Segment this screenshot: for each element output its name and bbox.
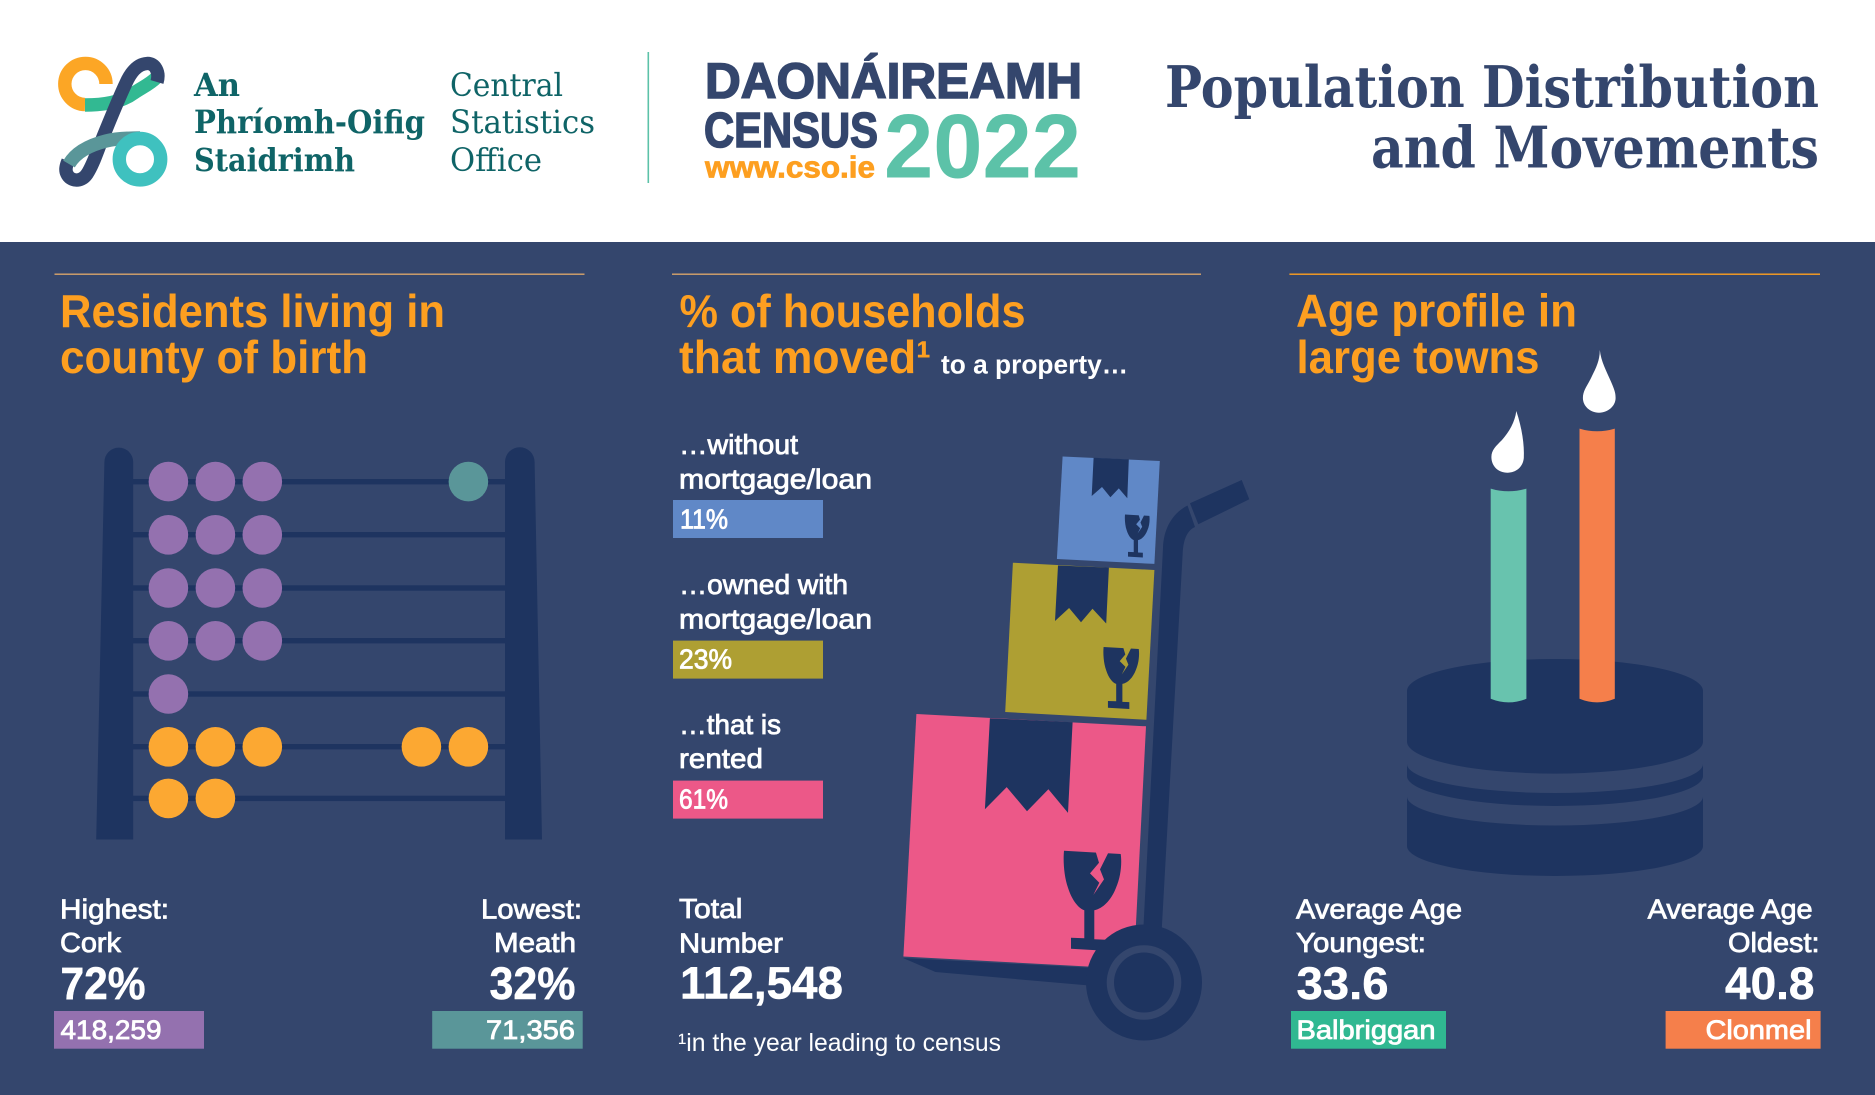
stat: highest Cork: 418,259: [60, 1015, 162, 1045]
header: CSO logo: [65, 63, 595, 180]
logo text: English name: [450, 66, 595, 179]
stat: youngest Balbriggan: [1291, 894, 1462, 1049]
header: census logo: CENSUS: [704, 104, 878, 158]
footnote: ¹in the year leading to census: [678, 1029, 1001, 1057]
heading: Age profile in: [1296, 284, 1577, 336]
abacus chart: [96, 447, 542, 840]
stat: youngest Balbriggan: Balbriggan: [1296, 1015, 1436, 1045]
stat: oldest Clonmel: Oldest:: [1728, 927, 1820, 958]
stat: total number: 112,548: [680, 957, 843, 1008]
stat: oldest Clonmel: Average Age: [1648, 894, 1813, 924]
title: and Movements: [1371, 114, 1819, 182]
heading: [60, 285, 445, 383]
stat: lowest Meath: 71,356: [486, 1015, 575, 1045]
stat: oldest Clonmel: Clonmel: [1706, 1015, 1812, 1045]
header: census logo: www.cso.ie: [704, 150, 875, 184]
logo text: English name: Central: [450, 66, 563, 104]
panel: residents living in county of birth: [54, 274, 584, 1049]
icon: fragile glass: [1064, 851, 1121, 951]
stat: total number: Total: [679, 893, 742, 924]
panel: households that moved: [672, 274, 1249, 1057]
logo text: Irish name: [193, 66, 425, 179]
bar: owned with mortgage/loan 23%: mortgage/loan: [679, 604, 872, 634]
box: blue: [1057, 456, 1160, 564]
panel: age profile in large towns: [1289, 274, 1821, 1049]
logo text: Irish name: Phríomh-Oifig: [194, 103, 425, 141]
bar: owned with mortgage/loan 23%: 23%: [679, 644, 732, 674]
heading: % of households: [680, 285, 1026, 337]
header: census logo: DAONÁIREAMH: [705, 53, 1082, 109]
bar: without mortgage/loan 11%: mortgage/loan: [679, 464, 872, 494]
heading: county of birth: [60, 331, 368, 383]
stat: lowest Meath: 32%: [490, 958, 576, 1009]
stat: youngest Balbriggan: Youngest:: [1296, 927, 1426, 958]
heading: that moved¹: [679, 331, 931, 383]
bar: owned with mortgage/loan 23%: [673, 569, 872, 679]
trolley wheel: [1086, 924, 1202, 1040]
heading: large towns: [1296, 331, 1540, 383]
stat: highest Cork: [54, 894, 204, 1049]
icon: fragile glass: [1103, 647, 1139, 709]
heading: [679, 285, 1128, 383]
box: olive: [1005, 563, 1154, 720]
icon: CSO knot mark: [65, 63, 161, 180]
illustration: hand truck with boxes: [903, 456, 1249, 1040]
bar: rented 61%: rented: [679, 743, 763, 774]
candle: oldest: [1580, 350, 1616, 702]
header: census logo: 2022: [884, 96, 1081, 198]
stat: highest Cork: Cork: [60, 927, 122, 958]
stat: lowest Meath: Meath: [494, 927, 576, 958]
stat: youngest Balbriggan: 33.6: [1296, 958, 1388, 1009]
bar: rented 61%: 61%: [679, 784, 728, 814]
stat: oldest Clonmel: [1648, 894, 1821, 1049]
bar: without mortgage/loan 11%: [673, 429, 872, 538]
logo text: Irish name: Staidrimh: [194, 141, 355, 179]
stat: total number: [679, 893, 843, 1008]
candle: youngest: [1491, 411, 1526, 702]
illustration: birthday cake: [1407, 350, 1703, 876]
stat: youngest Balbriggan: Average Age: [1296, 894, 1462, 924]
logo text: Irish name: An: [193, 66, 240, 104]
stat: oldest Clonmel: 40.8: [1725, 958, 1814, 1009]
bar: rented 61%: [673, 709, 823, 819]
header: census logo: [704, 53, 1082, 198]
stat: lowest Meath: [432, 894, 583, 1049]
stat: total number: Number: [679, 928, 783, 958]
box: pink: [903, 714, 1146, 969]
heading: [1296, 284, 1577, 383]
heading: to a property…: [941, 350, 1128, 380]
stat: highest Cork: 72%: [60, 958, 146, 1009]
bar: without mortgage/loan 11%: 11%: [680, 504, 728, 534]
bar: rented 61%: …that is: [679, 709, 781, 740]
icon: fragile glass: [1125, 514, 1150, 558]
logo text: English name: Statistics: [450, 103, 595, 141]
trolley frame: [903, 480, 1249, 986]
logo text: English name: Office: [450, 141, 542, 179]
stat: lowest Meath: Lowest:: [481, 894, 582, 924]
title: [1165, 54, 1819, 182]
bar: without mortgage/loan 11%: …without: [679, 429, 798, 460]
stat: highest Cork: Highest:: [60, 894, 169, 924]
heading: Residents living in: [60, 285, 445, 337]
bar: owned with mortgage/loan 23%: …owned with: [679, 569, 848, 600]
